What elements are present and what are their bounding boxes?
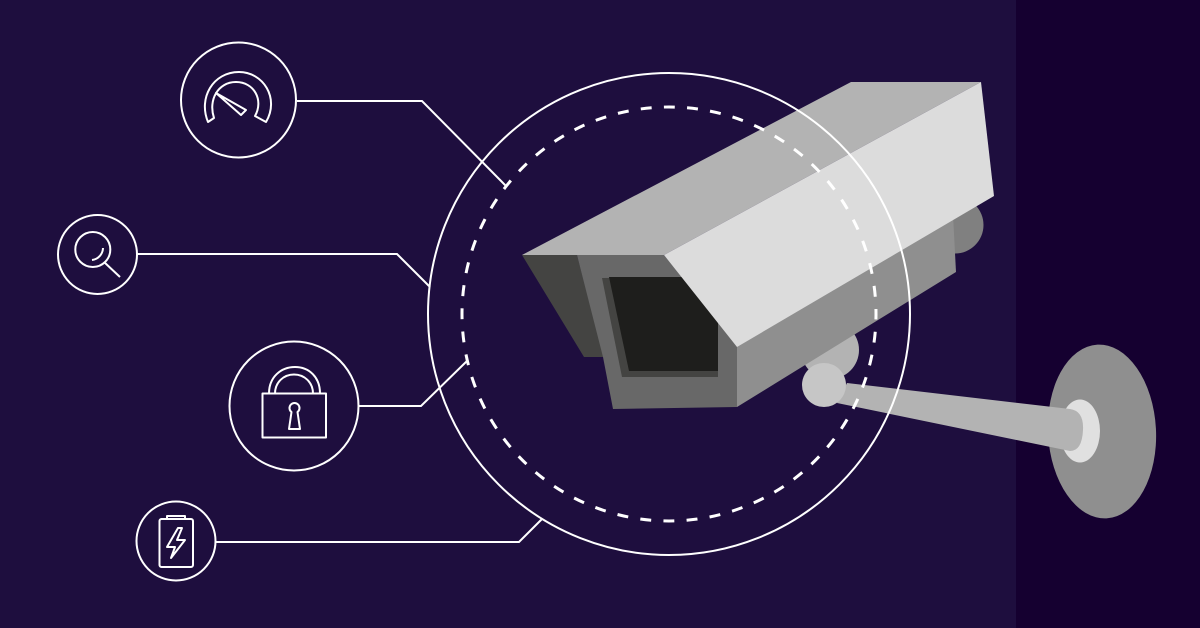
connector: magnifier xyxy=(137,254,430,287)
connector: gauge xyxy=(297,101,506,186)
camera arm xyxy=(801,321,1083,451)
outer circle xyxy=(428,73,910,555)
connector: battery xyxy=(216,519,542,542)
icon: magnifier xyxy=(58,215,137,294)
icon: battery xyxy=(136,502,216,580)
icon: lock xyxy=(230,342,358,470)
wall panel xyxy=(1016,0,1200,628)
wall mount xyxy=(1044,342,1160,521)
dashed circle xyxy=(462,107,876,521)
connector: lock xyxy=(359,360,468,406)
camera body xyxy=(522,82,994,409)
icon: gauge xyxy=(181,42,296,158)
